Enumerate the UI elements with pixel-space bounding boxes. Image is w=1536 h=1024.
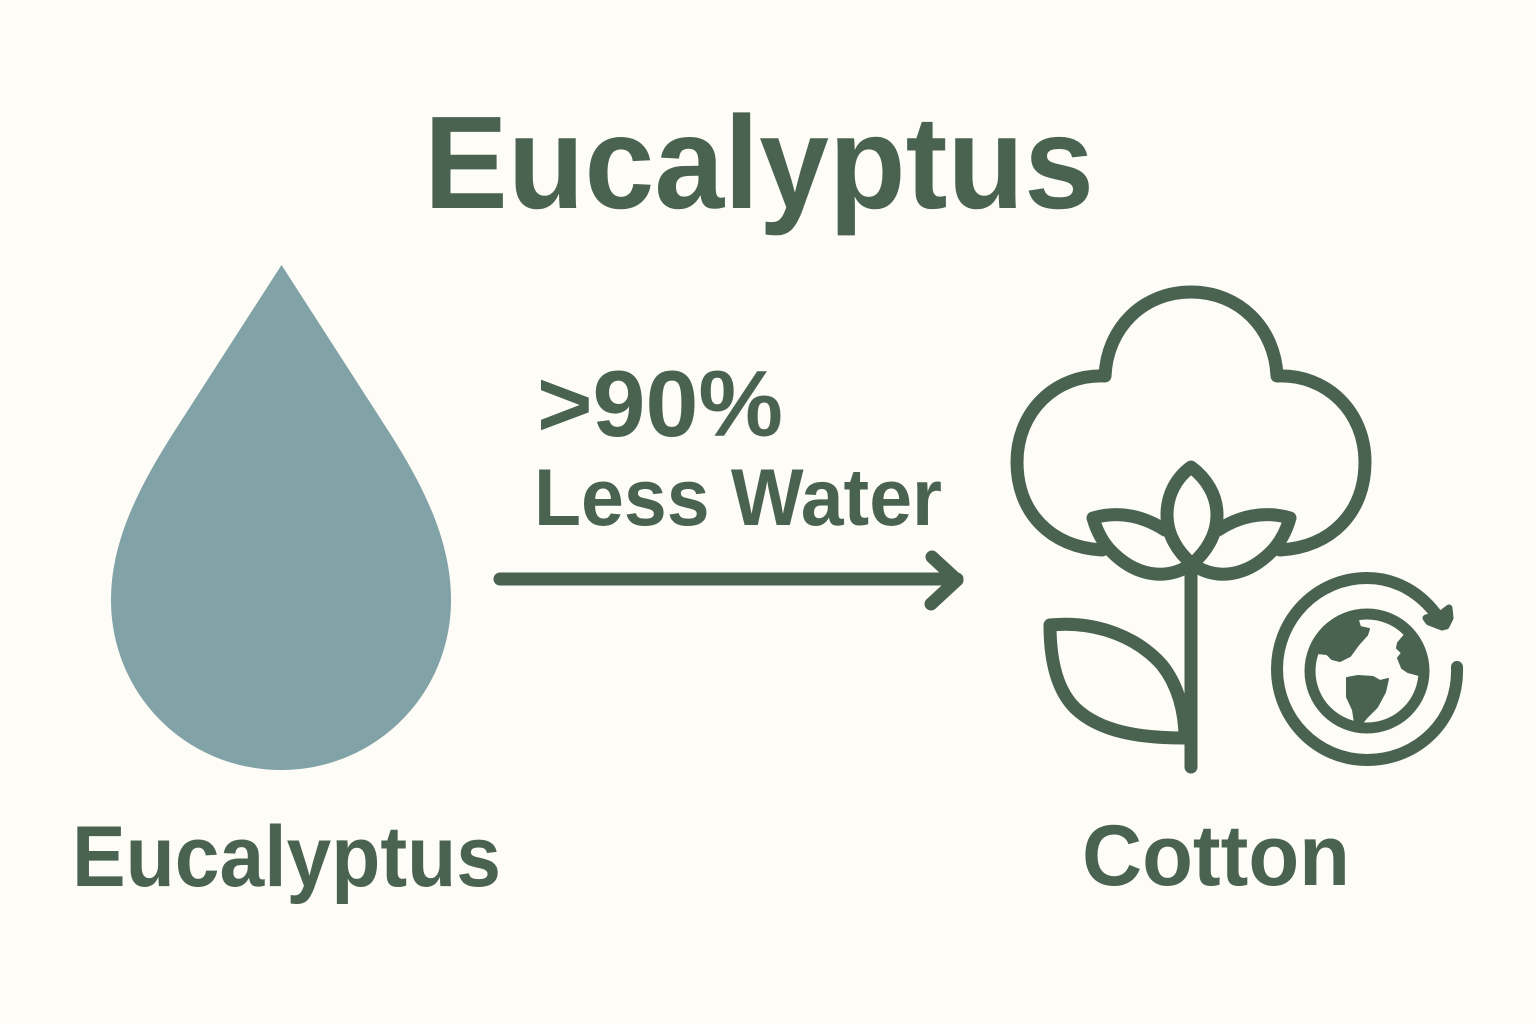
center petal [1167, 467, 1217, 564]
stem [1184, 568, 1198, 767]
continent: north [1312, 617, 1369, 661]
icon: water drop [111, 265, 451, 770]
arrow [500, 557, 957, 604]
label: eucalyptus: Eucalyptus [72, 809, 501, 905]
arrowhead [1426, 608, 1450, 627]
icon: cotton plant [1017, 292, 1365, 767]
stat label: less water: Less Water [534, 453, 942, 543]
icon: globe with circular arrow [1277, 578, 1457, 760]
globe ring [1310, 614, 1424, 728]
leaf [1050, 624, 1185, 738]
right petal [1192, 515, 1290, 574]
circular arrow [1277, 578, 1457, 760]
left petal [1093, 515, 1192, 574]
title: Eucalyptus [424, 89, 1094, 236]
continent: south [1347, 676, 1388, 723]
cotton boll outline [1017, 292, 1365, 550]
label: cotton: Cotton [1082, 808, 1350, 904]
continent: east [1397, 630, 1424, 675]
stat: greater than 90 percent: >90% [537, 351, 783, 456]
